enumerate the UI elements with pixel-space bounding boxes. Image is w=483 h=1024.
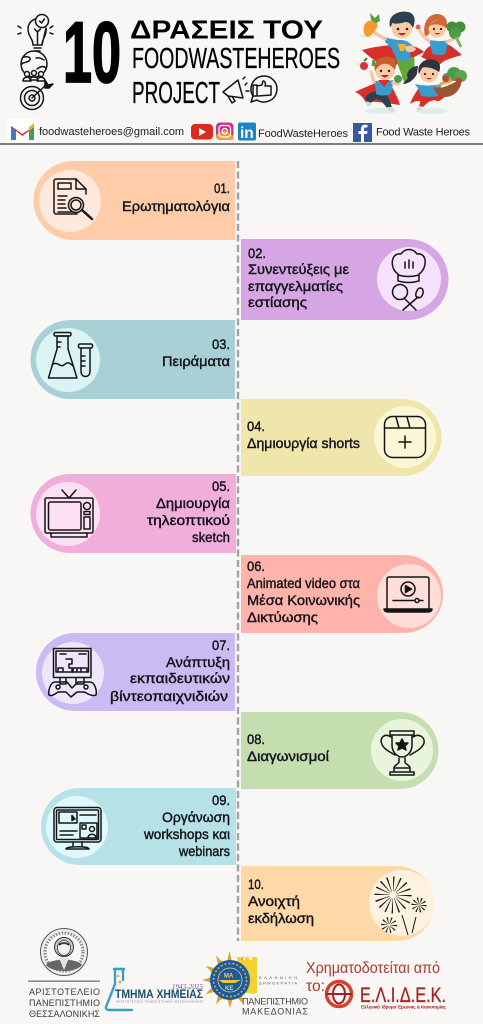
panel 06: animated video: Animated video στα: [247, 575, 360, 591]
logo: Department of Chemistry: ΑΡΙΣΤΟΤΕΛΕΙΟ ΠΑΝΕΠΙΣΤΗΜΙΟ ΘΕΣΣΑΛΟΝΙΚΗΣ: [116, 1000, 203, 1004]
panel 09: workshops and webinars: workshops και: [143, 826, 230, 842]
icon: facebook: [353, 123, 372, 142]
big number 10: 10: [63, 5, 121, 101]
blue seal: [210, 960, 250, 1000]
panel 09: workshops and webinars: Οργάνωση: [162, 809, 230, 825]
icon: chef hat and utensils: [392, 250, 425, 310]
panel 05: tv sketch: [31, 474, 236, 553]
panel 02: interviews: 02.: [248, 245, 266, 261]
icon: television: [45, 490, 93, 537]
panel 10: open event: 10.: [248, 876, 264, 892]
linkedin handle: FoodWasteHeroes: [258, 128, 348, 140]
icon: flask and test tube: [48, 332, 92, 378]
panel 06: animated video: 06.: [247, 558, 265, 574]
funding note and ELIDEK logo: Χρηματοδοτείται από: [306, 960, 440, 977]
icon: trophy: [381, 731, 424, 775]
icon: megaphone: [223, 77, 249, 103]
email address: foodwasteheroes@gmail.com: [39, 126, 184, 138]
icon: instagram: [216, 122, 234, 140]
hero: bottom boy: [355, 57, 402, 112]
icon: desktop monitor with video call: [54, 808, 101, 849]
funding note and ELIDEK logo: Ελληνικό Ίδρυμα Έρευνας & Καινοτομίας: [361, 1004, 447, 1010]
panel 03: experiments: Πειράματα: [162, 353, 230, 369]
panel 07: video games: βίντεοπαιχνιδιών: [110, 688, 228, 704]
hero: top girl with broccoli: [416, 14, 466, 67]
panel 10: open event: Ανοιχτή: [248, 893, 300, 909]
panel 07: video games: [36, 633, 235, 711]
title line: PROJECT: PROJECT: [132, 75, 220, 110]
panel 07: video games: 07.: [212, 637, 230, 653]
panel 05: tv sketch: τηλεοπτικού: [147, 512, 230, 528]
panel 06: animated video: Μέσα Κοινωνικής: [247, 592, 360, 608]
panel 01: questionnaires: 01.: [214, 180, 230, 196]
panel 04: shorts: 04.: [247, 418, 265, 434]
panel 08: competitions: [241, 712, 438, 789]
panel 10: open event: εκδήλωση: [248, 910, 314, 926]
panel 07: video games: Ανάπτυξη: [166, 654, 230, 670]
logo: Aristotle University of Thessaloniki: ΑΡΙΣΤΟΤΕΛΕΙΟ: [29, 987, 100, 997]
logo: University of Macedonia: ΔΗΜΟΚΡΑΤΙΑ: [259, 980, 297, 986]
panel 04: shorts: Δημιουργία shorts: [247, 435, 360, 451]
panel 07: video games: εκπαιδευτικών: [130, 670, 230, 686]
panel 02: interviews: εστίασης: [248, 294, 307, 310]
panel 10: open event: [241, 866, 435, 941]
panel 08: competitions: Διαγωνισμοί: [247, 748, 329, 764]
panel 06: animated video: Δικτύωσης: [247, 609, 318, 625]
logo: University of Macedonia: [202, 951, 308, 1016]
panel 05: tv sketch: Δημιουργία: [156, 495, 230, 511]
logo: University of Macedonia: ΕΛΛΗΝΙΚΗ: [259, 975, 297, 980]
contact bar: [7, 119, 470, 145]
facebook page name: Food Waste Heroes: [376, 126, 470, 138]
hero: top boy with carrot: [362, 12, 424, 83]
title: [63, 5, 340, 110]
ground shadows: [356, 34, 448, 114]
panel 09: workshops and webinars: 09.: [212, 792, 230, 808]
panel 05: tv sketch: sketch: [192, 529, 230, 545]
icon: gmail: [7, 119, 37, 145]
panel 02: interviews: Συνεντεύξεις με: [248, 261, 349, 277]
icon: linkedin: in: [240, 125, 254, 142]
panel 04: shorts: [241, 399, 442, 476]
logo: University of Macedonia: ΜΑΚΕΔΟΝΙΑΣ: [242, 1006, 308, 1016]
panel 09: workshops and webinars: [41, 788, 236, 865]
logo: Aristotle University of Thessaloniki: ΠΑΝΕΠΙΣΤΗΜΙΟ: [29, 998, 100, 1008]
panel 02: interviews: επαγγελματίες: [248, 278, 343, 294]
panel 09: workshops and webinars: webinars: [178, 843, 230, 859]
heroes illustration: [355, 12, 467, 114]
funding note and ELIDEK logo: [306, 960, 447, 1010]
icon: youtube: [191, 124, 213, 140]
funding note and ELIDEK logo: το:: [306, 978, 325, 995]
logo: University of Macedonia: ΜΑ: [224, 974, 234, 980]
icon: retro game screen and controllers: [49, 648, 96, 697]
panel 02: interviews: [241, 239, 448, 320]
hero: bottom girl with basket: [403, 59, 467, 112]
logo: Department of Chemistry: 1943-2025: [172, 983, 204, 991]
icon: flask: [106, 969, 132, 1010]
icon: clapperboard with plus: [384, 416, 426, 458]
icon: thumbs up speech bubble: [251, 76, 277, 102]
header icon: idea, globe and target: [18, 14, 53, 110]
logo: University of Macedonia: ΠΑΝΕΠΙΣΤΗΜΙΟ: [242, 996, 308, 1006]
panel 03: experiments: 03.: [212, 336, 230, 352]
panel 05: tv sketch: 05.: [212, 478, 230, 494]
title line: ΔΡΑΣΕΙΣ ΤΟΥ: ΔΡΑΣΕΙΣ ΤΟΥ: [130, 14, 323, 44]
seal: [40, 928, 88, 976]
panel 01: questionnaires: Ερωτηματολόγια: [122, 198, 230, 214]
icon: laptop with play button: [384, 577, 432, 612]
logo: Department of Chemistry: [106, 969, 204, 1010]
panel 03: experiments: [31, 320, 235, 399]
logo: Aristotle University of Thessaloniki: [28, 928, 100, 1019]
panel 01: questionnaires: [34, 161, 235, 240]
icon: fireworks: [382, 884, 423, 935]
sun rays: [202, 951, 256, 1008]
panel 08: competitions: 08.: [247, 731, 265, 747]
castle emblem: [237, 957, 257, 993]
title line: FOODWASTEHEROES: FOODWASTEHEROES: [132, 43, 340, 75]
logo: Department of Chemistry: ΤΜΗΜΑ ΧΗΜΕΙΑΣ: [115, 989, 203, 1001]
logo: University of Macedonia: ΚΕ: [225, 986, 233, 992]
panel 06: animated video: [241, 555, 443, 633]
funding note and ELIDEK logo: Ε.Λ.Ι.Δ.Ε.Κ.: [360, 983, 446, 1007]
logo: Aristotle University of Thessaloniki: ΘΕΣΣΑΛΟΝΙΚΗΣ: [29, 1009, 100, 1019]
icon: document with magnifier: [54, 179, 92, 219]
icon: linkedin: [238, 122, 256, 142]
icon: ELIDEK emblem: [326, 982, 352, 1006]
